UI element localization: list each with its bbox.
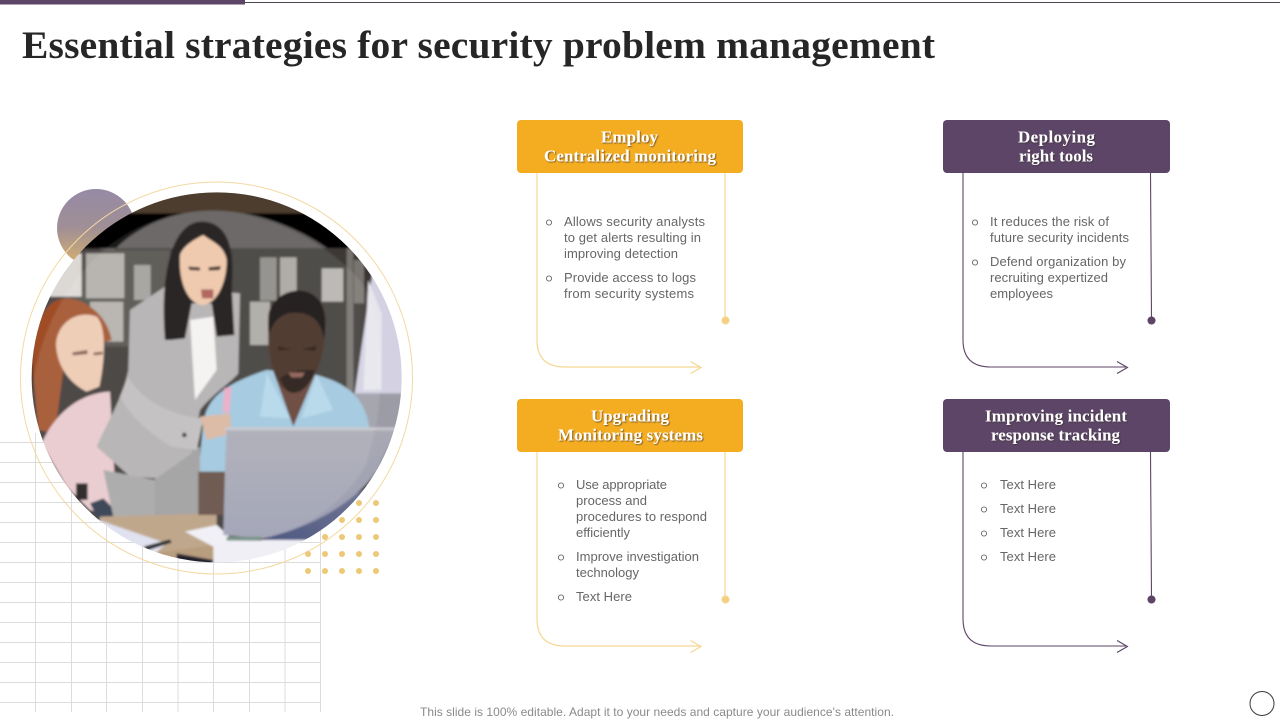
bullet list: Improve investigation (576, 549, 699, 564)
back windows (30, 250, 170, 347)
bullet list: Defend organization by (990, 254, 1126, 269)
bullet list: Provide access to logs (564, 270, 696, 285)
connector: yellow arrow (537, 173, 729, 374)
footer note: This slide is 100% editable. Adapt it to your needs and capture your audience's attention. (420, 705, 894, 719)
bullet list: recruiting expertized (990, 270, 1108, 285)
header: Monitoring systems (558, 426, 703, 444)
whiteboard (353, 274, 402, 395)
header (943, 399, 1170, 452)
translucent overlay (30, 211, 381, 570)
connector: yellow arrow (537, 452, 729, 652)
desk and papers (100, 513, 217, 567)
photo: three colleagues at a laptop (30, 190, 407, 570)
connector: purple arrow (963, 452, 1155, 652)
bullet list (981, 477, 1056, 564)
header (517, 399, 743, 452)
bullet list: to get alerts resulting in (564, 230, 701, 245)
header: response tracking (991, 426, 1121, 444)
panel: upgrading monitoring systems (517, 399, 743, 652)
header: right tools (1019, 146, 1093, 166)
title: Essential strategies for security problem management (22, 23, 935, 67)
dot pattern (305, 500, 379, 574)
bullet list: efficiently (576, 525, 630, 540)
bullet list: process and (576, 493, 647, 508)
panel: improving incident response tracking (943, 399, 1170, 652)
outer ring (20, 182, 412, 574)
top accent bar (0, 0, 1280, 4)
corner circle (1250, 692, 1274, 716)
header: Employ (601, 128, 659, 146)
bullet list: improving detection (564, 246, 678, 261)
connector: purple arrow (963, 173, 1155, 374)
bullet list: Allows security analysts (564, 214, 706, 229)
bullet list (546, 214, 706, 301)
bullet list (558, 477, 707, 604)
decorative gradient circle (57, 189, 135, 267)
left woman (33, 298, 112, 433)
panel: employ centralized monitoring (517, 120, 743, 374)
upper wall tinted by the translucent disc (98, 210, 346, 250)
panel: deploying right tools (943, 120, 1170, 374)
bullet list: employees (990, 286, 1054, 301)
header: Upgrading (591, 406, 670, 426)
bullet list: Text Here (1000, 525, 1056, 540)
bullet list: It reduces the risk of (990, 214, 1109, 229)
man (198, 370, 370, 473)
background grid (0, 433, 320, 712)
header: Centralized monitoring (544, 146, 717, 166)
bullet list: procedures to respond (576, 509, 707, 524)
bullet list: Text Here (1000, 549, 1056, 564)
bullet list: future security incidents (990, 230, 1130, 245)
bullet list: Text Here (576, 589, 632, 604)
header: Improving incident (985, 406, 1127, 426)
bullet list: Text Here (1000, 501, 1056, 516)
standing woman (103, 470, 157, 517)
bullet list (972, 214, 1130, 301)
bullet list: Use appropriate (576, 477, 667, 492)
header (943, 120, 1170, 173)
header: Deploying (1018, 128, 1096, 146)
header (517, 120, 743, 173)
bullet list: technology (576, 565, 640, 580)
bullet list: from security systems (564, 286, 694, 301)
laptop (264, 442, 390, 540)
bullet list: Text Here (1000, 477, 1056, 492)
